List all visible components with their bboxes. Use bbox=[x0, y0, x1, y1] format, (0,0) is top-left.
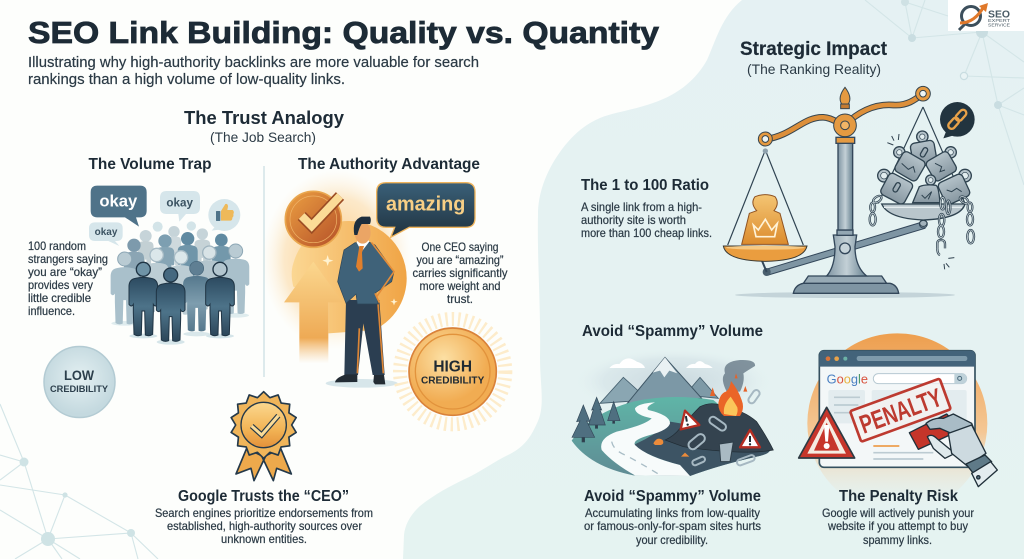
glow bbox=[262, 170, 412, 350]
smoke bbox=[723, 360, 755, 392]
trash pile bbox=[665, 404, 773, 452]
speech bubble: amazing: amazing bbox=[386, 194, 465, 216]
text: avoid spammy description: or famous-only-for-spam sites hurts bbox=[584, 519, 761, 533]
heading: the trust analogy: (The Job Search) bbox=[210, 129, 316, 145]
subtitle: Illustrating why high-authority backlinks are more valuable for search bbox=[28, 54, 479, 71]
orange circle backdrop bbox=[807, 333, 987, 513]
badge: low credibility bbox=[44, 346, 115, 418]
clouds bbox=[609, 358, 713, 368]
heading: the trust analogy bbox=[184, 108, 344, 145]
text: volume trap description bbox=[28, 239, 108, 318]
robot hand with stamp bbox=[909, 414, 997, 487]
crowd of people bbox=[111, 221, 249, 345]
text: ratio description: authority site is worth bbox=[581, 213, 686, 227]
logo: SEO expert service: EXPERT bbox=[988, 18, 1010, 23]
trash can bbox=[719, 442, 733, 462]
text: ratio description: more than 100 cheap links. bbox=[581, 226, 712, 240]
winding road bbox=[601, 402, 690, 476]
right pan with pile of cheap link weights bbox=[870, 107, 974, 269]
text: avoid spammy description bbox=[584, 506, 761, 547]
illustration: CEO with authority symbols bbox=[262, 170, 505, 424]
ground bbox=[572, 397, 771, 476]
icon: award rosette bbox=[231, 392, 296, 481]
text: google trusts description bbox=[155, 506, 373, 546]
sparkles bbox=[322, 255, 398, 305]
warning triangle bbox=[799, 407, 855, 458]
text: authority advantage description: trust. bbox=[447, 292, 473, 306]
browser window: Google bbox=[827, 372, 868, 387]
text: google trusts description: Search engines prioritize endorsements from bbox=[155, 506, 373, 520]
heading: the 1 to 100 ratio: The 1 to 100 Ratio bbox=[581, 177, 709, 194]
hanging chains bbox=[870, 194, 974, 255]
heading: strategic impact bbox=[740, 39, 888, 77]
stamp: penalty bbox=[850, 379, 951, 442]
speech bubble: okay medium bbox=[160, 191, 200, 222]
logo: SEO expert service bbox=[948, 0, 1024, 31]
heading: the penalty risk: The Penalty Risk bbox=[839, 488, 958, 505]
arrow: upward bbox=[284, 262, 343, 363]
title: SEO Link Building: Quality vs. Quantity bbox=[28, 15, 660, 50]
heading: google trusts the CEO: Google Trusts the “CEO” bbox=[178, 488, 349, 505]
speech bubble: okay small bbox=[89, 222, 123, 246]
fire bbox=[718, 381, 743, 416]
scale pivot and finial bbox=[758, 86, 930, 146]
speech bubble: link icon bbox=[940, 102, 975, 138]
text: penalty risk description: website if you attempt to buy bbox=[827, 519, 968, 533]
text: authority advantage description: carries significantly bbox=[412, 266, 508, 280]
badge: low credibility: LOW bbox=[64, 367, 95, 383]
gold disc behind man bbox=[292, 221, 407, 333]
background panel: strategic impact blob bbox=[403, 0, 1024, 559]
heading: the trust analogy: The Trust Analogy bbox=[184, 108, 344, 128]
text: penalty risk description bbox=[822, 506, 974, 547]
text: volume trap description: influence. bbox=[28, 304, 75, 318]
scale beam bbox=[766, 93, 923, 139]
badge: high credibility bbox=[400, 319, 505, 424]
speech bubble: thumbs up bbox=[208, 199, 240, 231]
badge: low credibility: CREDIBILITY bbox=[50, 384, 109, 395]
illustration: google penalty browser bbox=[799, 333, 987, 513]
text: volume trap description: you are “okay” bbox=[28, 265, 102, 279]
speech bubble: okay medium: okay bbox=[166, 196, 193, 209]
badge: high credibility: CREDIBILITY bbox=[421, 375, 485, 386]
check mark medal bbox=[285, 191, 341, 247]
heading: avoid spammy volume upper: Avoid “Spammy” Volume bbox=[582, 323, 763, 340]
logo: SEO expert service: SEO bbox=[988, 10, 1010, 20]
text: penalty risk description: spammy links. bbox=[863, 533, 932, 547]
divider between volume and authority bbox=[263, 166, 265, 377]
scale column and base bbox=[793, 137, 899, 293]
left pan with crown weight bbox=[723, 148, 807, 261]
text: volume trap description: little credible bbox=[28, 291, 91, 305]
illustration: polluted landscape bbox=[572, 348, 773, 476]
warning triangles bbox=[681, 411, 760, 447]
text: google trusts description: established, high-authority sources over bbox=[167, 519, 362, 533]
text: authority advantage description: One CEO saying bbox=[422, 240, 498, 254]
subtitle: rankings than a high volume of low-quality links. bbox=[28, 71, 345, 88]
pan bbox=[882, 204, 965, 220]
embers bbox=[653, 439, 689, 457]
pile of weights bbox=[878, 131, 971, 206]
badge: high credibility: HIGH bbox=[433, 359, 472, 376]
text: avoid spammy description: Accumulating links from low-quality bbox=[585, 506, 760, 520]
text: penalty risk description: Google will actively punish your bbox=[822, 506, 974, 520]
text: google trusts description: unknown entities. bbox=[221, 532, 307, 546]
text: volume trap description: provides very bbox=[28, 278, 93, 292]
speech bubble: okay large bbox=[91, 186, 147, 227]
heading: the volume trap: The Volume Trap bbox=[88, 156, 212, 173]
stamp: penalty: PENALTY bbox=[855, 382, 946, 440]
mountains bbox=[600, 377, 648, 403]
chain links on pile bbox=[687, 389, 761, 466]
speech bubble: amazing bbox=[377, 183, 475, 237]
text: volume trap description: 100 random bbox=[28, 239, 86, 253]
subtitle bbox=[28, 54, 479, 88]
speech bubble: okay large: okay bbox=[99, 192, 138, 211]
man in suit bbox=[326, 217, 398, 388]
text: authority advantage description: more weight and bbox=[420, 279, 500, 293]
illustration: crowd with speech bubbles bbox=[89, 186, 249, 345]
text: authority advantage description bbox=[412, 240, 508, 306]
network decoration: bottom left bbox=[0, 404, 158, 559]
heading: strategic impact: Strategic Impact bbox=[740, 39, 888, 60]
browser window bbox=[819, 351, 975, 467]
heading: strategic impact: (The Ranking Reality) bbox=[747, 61, 881, 77]
logo: SEO expert service: SERVICE bbox=[988, 22, 1010, 28]
text: ratio description: A single link from a high- bbox=[581, 200, 702, 214]
text: authority advantage description: you are “amazing” bbox=[416, 253, 504, 267]
text: ratio description bbox=[581, 200, 712, 240]
pine trees bbox=[572, 397, 620, 442]
scale strut bbox=[766, 222, 925, 275]
illustration: balance scale bbox=[723, 86, 955, 298]
text: avoid spammy description: your credibility. bbox=[636, 533, 708, 547]
text: volume trap description: strangers saying bbox=[28, 252, 108, 266]
heading: avoid spammy volume lower: Avoid “Spammy” Volume bbox=[584, 488, 761, 505]
heading: the authority advantage: The Authority Advantage bbox=[298, 156, 480, 173]
speech bubble: okay small: okay bbox=[95, 227, 118, 238]
network decoration: top right bbox=[865, 0, 1024, 185]
